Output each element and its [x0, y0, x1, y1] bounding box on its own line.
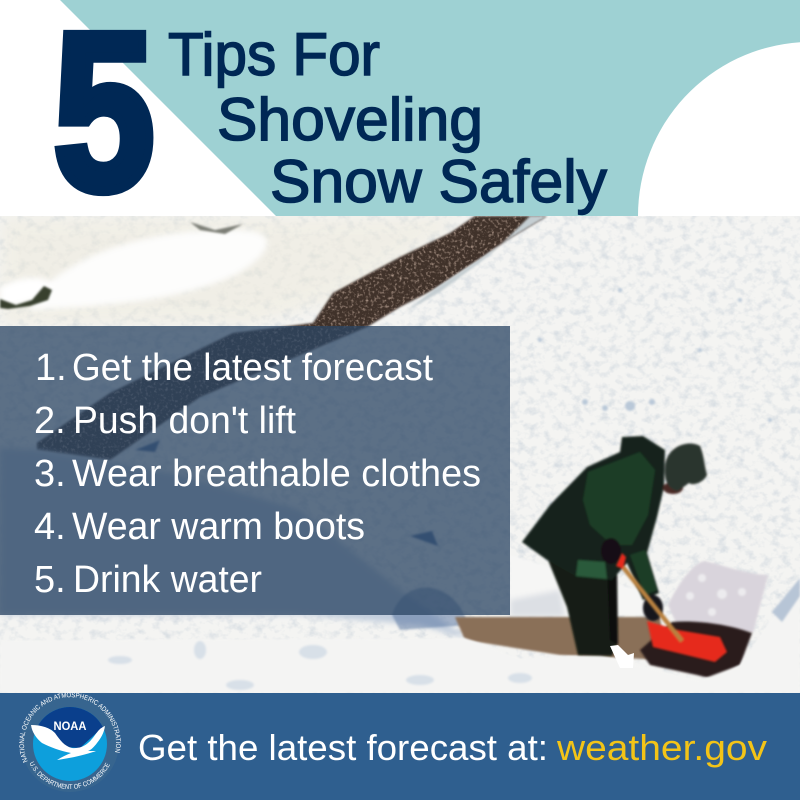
tips list: Wear breathable clothes	[72, 453, 481, 495]
jacket highlight	[583, 452, 655, 545]
tips list: Drink water	[73, 559, 262, 601]
NOAA wordmark: NOAA	[54, 721, 86, 733]
man	[522, 436, 707, 656]
hat	[665, 444, 707, 491]
teal diagonal banner	[60, 0, 800, 216]
ring text: NATIONAL OCEANIC AND ATMOSPHERIC ADMINISTRATION	[19, 692, 121, 763]
legs	[548, 560, 617, 656]
footer text	[138, 727, 767, 768]
header background	[0, 0, 800, 216]
tips list: 4.	[34, 506, 66, 548]
foreground snow	[0, 601, 800, 693]
snow pit wall	[668, 561, 768, 633]
footer text: weather.gov	[556, 727, 767, 768]
bushes in snow	[0, 222, 243, 309]
blue shadow lower left	[0, 448, 470, 640]
tips list: Get the latest forecast	[72, 347, 433, 389]
snowy path edge	[405, 216, 547, 312]
photo: man shoveling snow	[0, 216, 800, 693]
snow wall behind the man	[510, 555, 670, 616]
snow chunk by boot	[610, 645, 634, 668]
scattered snow clumps	[538, 288, 772, 422]
gloves	[601, 538, 621, 564]
shovel	[616, 553, 727, 662]
title	[168, 21, 607, 215]
title: Snow Safely	[270, 148, 607, 215]
footer text: Get the latest forecast at:	[138, 727, 548, 768]
face	[663, 482, 683, 494]
snow bank upper left	[0, 230, 267, 310]
tips list: 2.	[34, 400, 66, 442]
footer bar	[0, 693, 800, 800]
tips list: Push don't lift	[73, 400, 296, 442]
jacket	[522, 436, 665, 600]
white semicircle	[638, 42, 800, 216]
tips list: Wear warm boots	[72, 506, 365, 548]
warm tone upper left	[4, 220, 442, 322]
gull	[31, 725, 105, 760]
tips list: 3.	[34, 453, 66, 495]
cleared path	[37, 216, 547, 460]
shadows in the snow under panel	[135, 440, 468, 630]
ring text: U.S. DEPARTMENT OF COMMERCE	[30, 761, 110, 789]
tips list	[34, 347, 481, 601]
title: Shoveling	[217, 86, 483, 153]
ground	[455, 617, 665, 660]
list panel	[0, 326, 510, 615]
title: Tips For	[168, 21, 380, 88]
pit	[640, 622, 752, 680]
NOAA logo	[19, 692, 121, 789]
tips list: 5.	[34, 559, 66, 601]
tips list: 1.	[35, 347, 67, 389]
footprints	[108, 641, 532, 690]
